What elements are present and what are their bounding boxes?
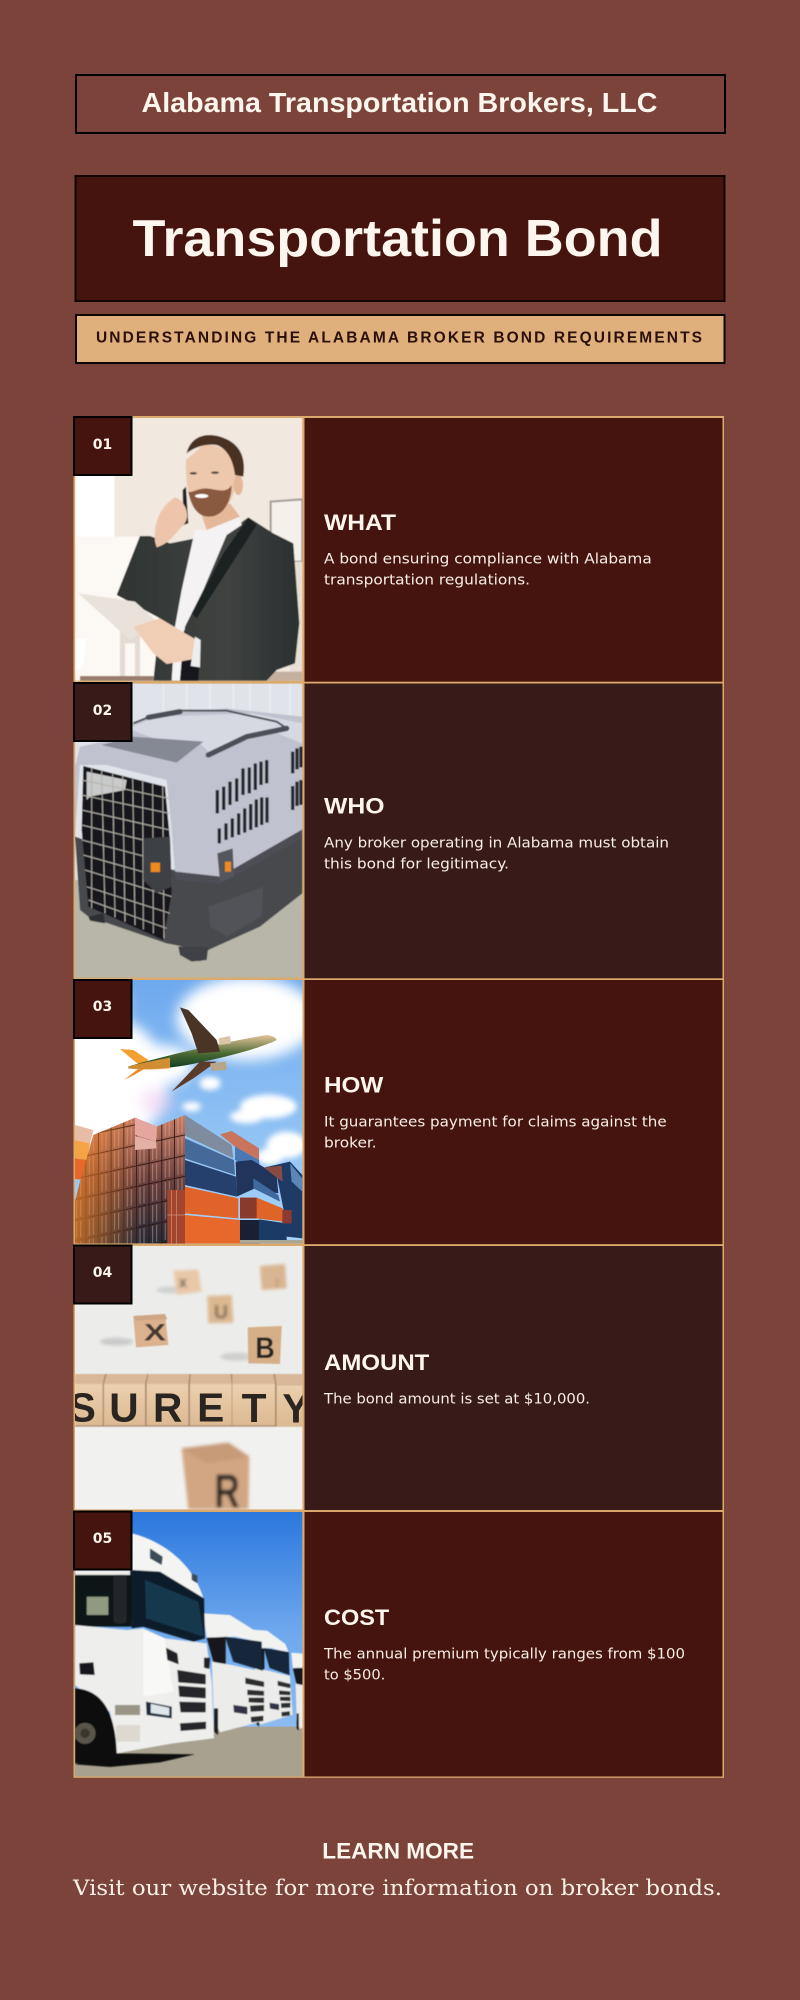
description: what: A bond ensuring compliance with Alabama xyxy=(324,551,652,567)
containers xyxy=(75,1125,93,1143)
description: cost: The annual premium typically ranges from $100 xyxy=(323,1646,685,1662)
plane xyxy=(120,1049,148,1066)
content background xyxy=(304,1512,722,1776)
photo: surety wooden letter blocks: S xyxy=(69,1384,96,1430)
photo: airplane over shipping containers xyxy=(75,980,302,1244)
photo: pet travel crate xyxy=(75,683,302,978)
number badge 01 xyxy=(74,417,132,475)
photo: surety wooden letter blocks: R xyxy=(153,1384,182,1430)
description: who xyxy=(324,835,669,872)
description: cost xyxy=(323,1646,685,1683)
subtitle banner xyxy=(76,315,724,363)
number badge 02 xyxy=(74,683,132,741)
content background xyxy=(304,684,722,978)
number badge 05 xyxy=(74,1512,132,1570)
photo: surety wooden letter blocks xyxy=(69,1246,310,1518)
panel: row 5 cost xyxy=(74,1510,724,1778)
description: how xyxy=(324,1115,667,1151)
panel: row 3 how xyxy=(33,977,724,1246)
title banner xyxy=(76,176,724,301)
subtitle banner: UNDERSTANDING THE ALABAMA BROKER BOND REQUIREMENTS xyxy=(96,330,702,346)
description: who: Any broker operating in Alabama must obtain xyxy=(324,835,669,851)
company name banner xyxy=(76,75,725,133)
photo: surety wooden letter blocks: X xyxy=(144,1320,166,1347)
company name banner: Alabama Transportation Brokers, LLC xyxy=(142,87,658,118)
content background xyxy=(304,418,722,682)
photo: surety wooden letter blocks: T xyxy=(242,1385,267,1431)
number badge 05: 05 xyxy=(93,1531,112,1547)
photo: row of white trucks xyxy=(74,1512,324,1777)
heading: how: HOW xyxy=(324,1073,384,1098)
photo: surety wooden letter blocks: U xyxy=(109,1384,139,1430)
number badge 03: 03 xyxy=(93,999,112,1015)
call to action text: Visit our website for more information on broker bonds. xyxy=(72,1876,722,1900)
content background xyxy=(304,980,722,1244)
photo: surety wooden letter blocks: B xyxy=(255,1332,275,1365)
number badge 04 xyxy=(74,1246,132,1304)
panel: row 1 what xyxy=(74,416,724,684)
photo: surety wooden letter blocks: : xyxy=(275,1274,279,1289)
description: what xyxy=(324,551,652,588)
description: how: broker. xyxy=(324,1135,377,1151)
description: how: It guarantees payment for claims against the xyxy=(324,1115,667,1131)
photo: surety wooden letter blocks: E xyxy=(197,1384,224,1430)
number badge 03 xyxy=(74,980,132,1038)
heading: cost: COST xyxy=(324,1605,390,1630)
photo: surety wooden letter blocks: x xyxy=(179,1274,188,1291)
description: amount: The bond amount is set at $10,000. xyxy=(323,1391,590,1407)
heading: what: WHAT xyxy=(324,510,396,535)
content background xyxy=(304,1246,722,1510)
number badge 04: 04 xyxy=(93,1265,112,1281)
heading: amount: AMOUNT xyxy=(324,1350,430,1375)
description: what: transportation regulations. xyxy=(324,572,530,588)
heading: who: WHO xyxy=(324,793,384,818)
photo: businessman on the phone xyxy=(75,417,302,681)
photo: surety wooden letter blocks: Y xyxy=(282,1386,310,1432)
number badge 01: 01 xyxy=(93,437,112,453)
title banner: Transportation Bond xyxy=(132,210,662,268)
photo: surety wooden letter blocks: U xyxy=(214,1302,228,1323)
panel: row 4 amount xyxy=(69,1244,724,1518)
description: who: this bond for legitimacy. xyxy=(324,856,509,872)
description: cost: to $500. xyxy=(324,1667,385,1683)
number badge 02: 02 xyxy=(93,703,112,719)
panel: row 2 who xyxy=(74,682,724,980)
call to action heading: LEARN MORE xyxy=(322,1838,474,1863)
photo: surety wooden letter blocks: R xyxy=(214,1464,240,1518)
